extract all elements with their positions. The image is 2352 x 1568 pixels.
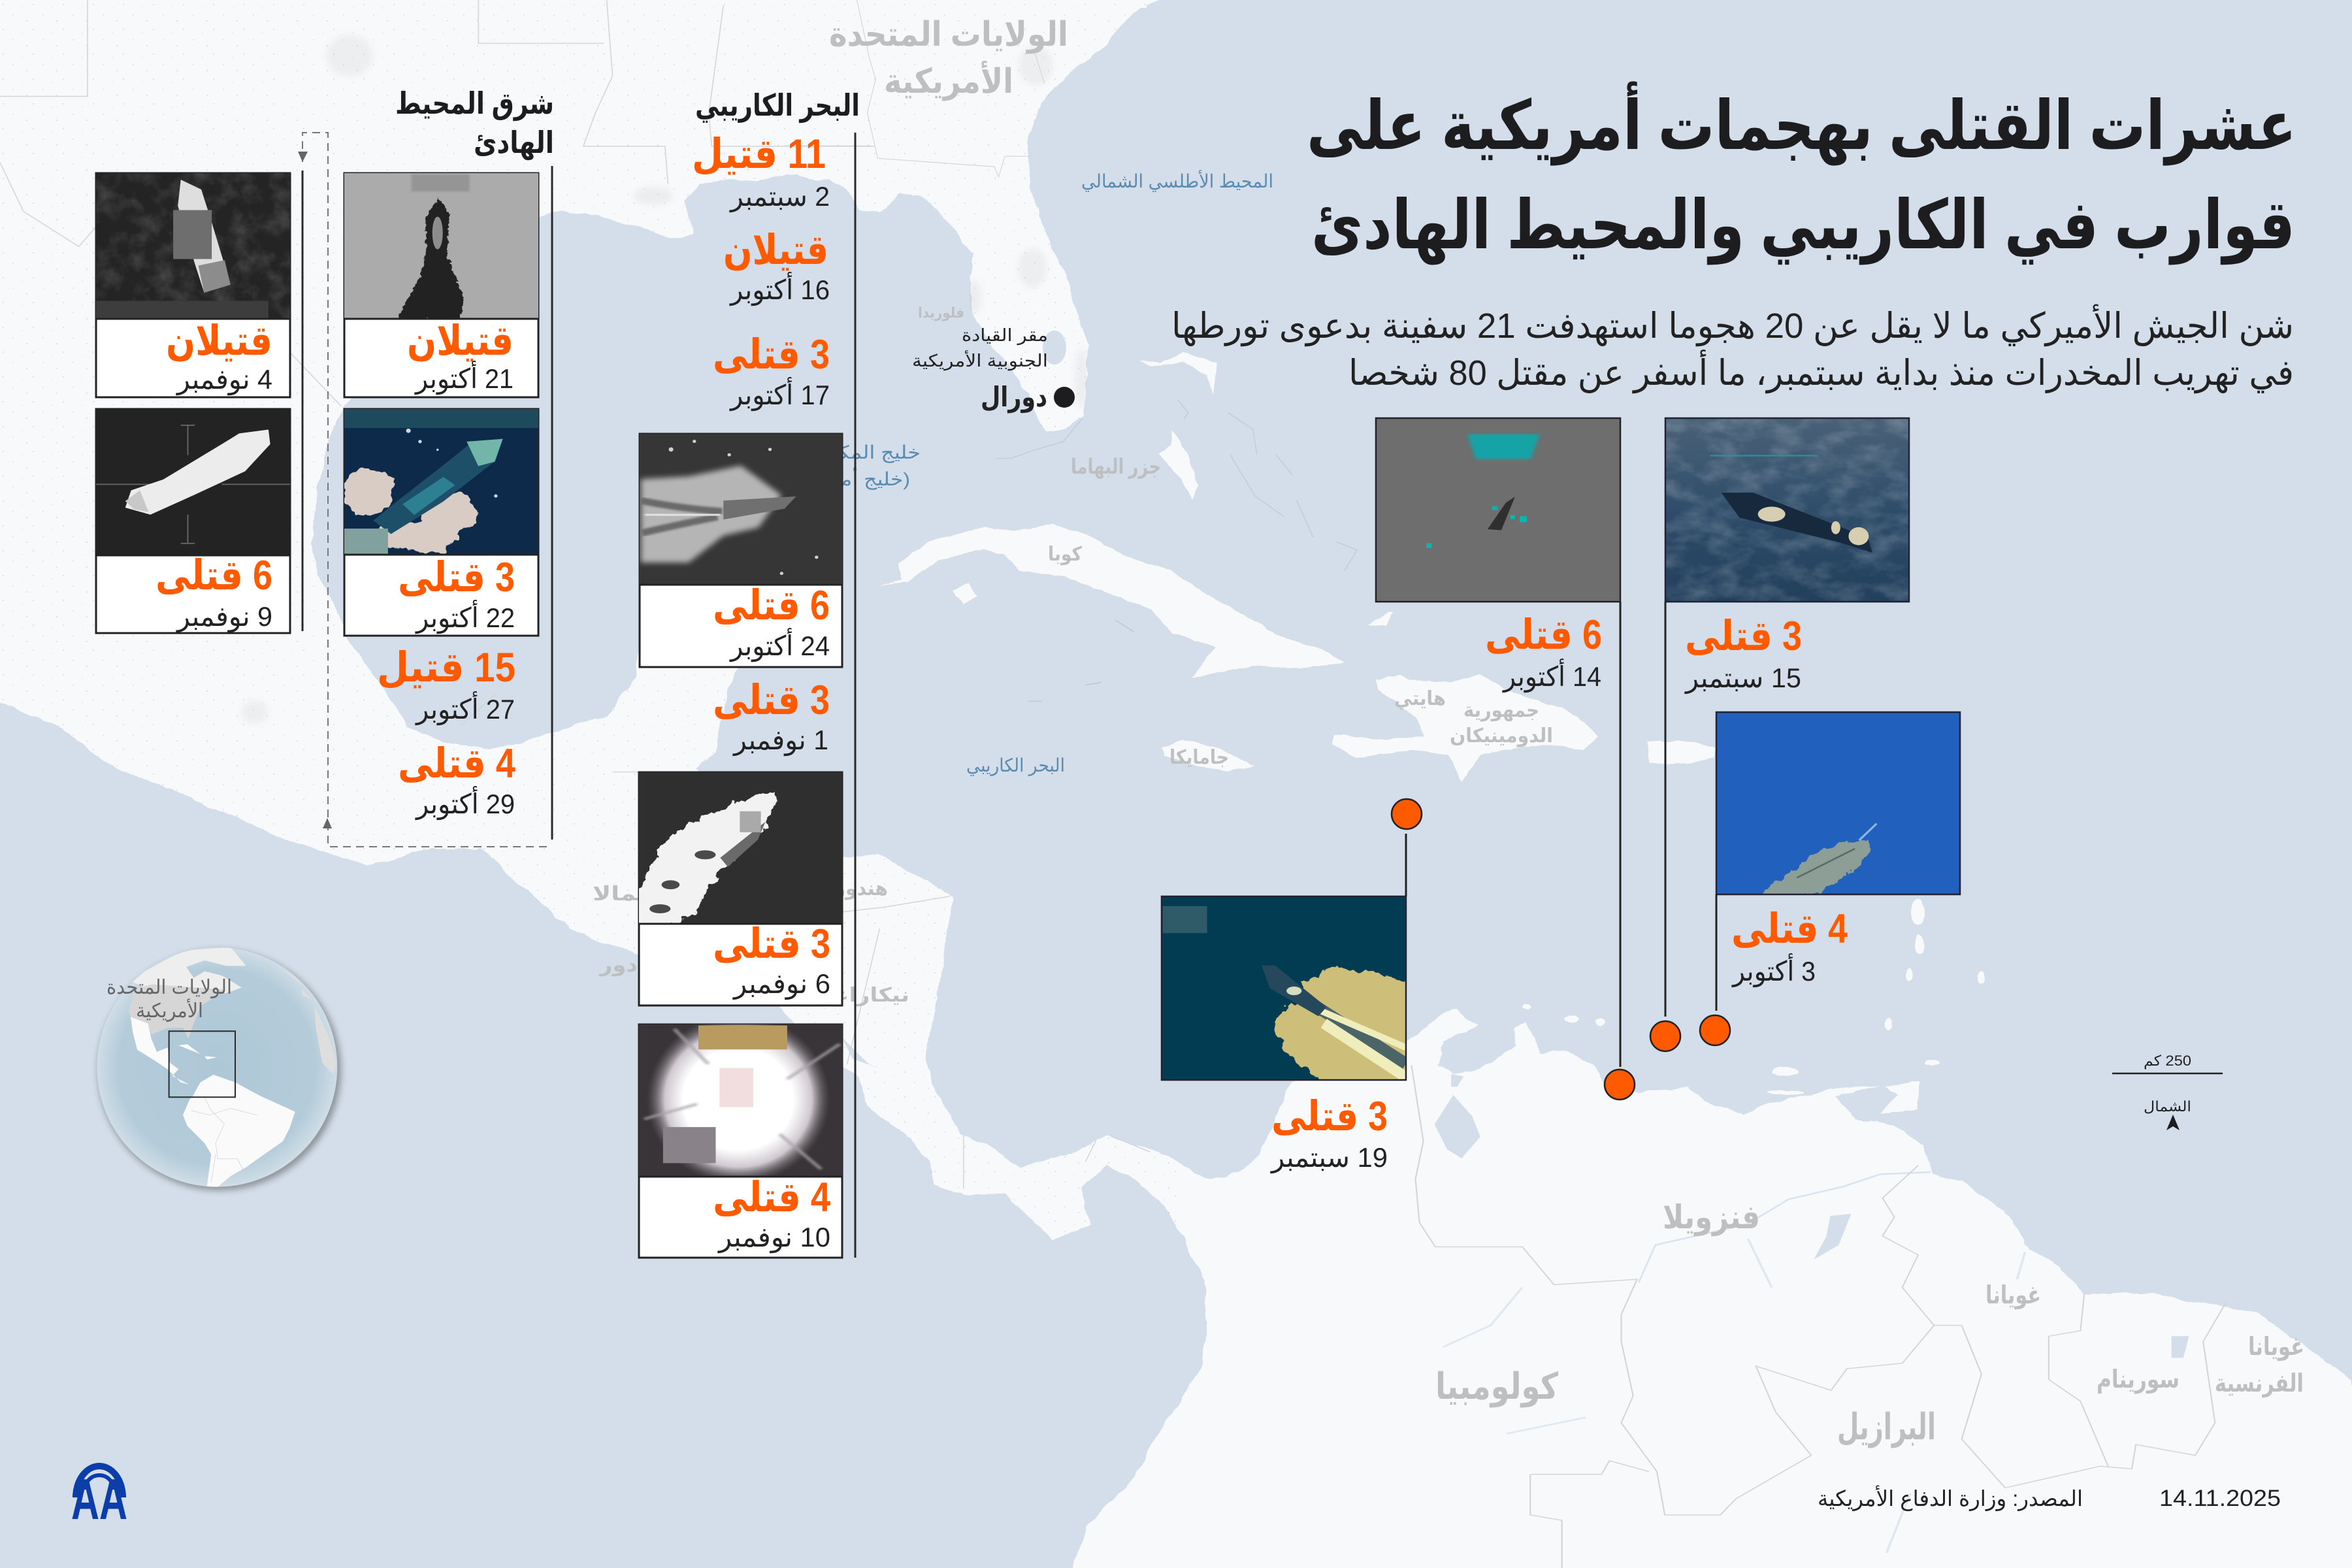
map labels: seas: خليج المكسيك <box>796 442 921 463</box>
map labels: countries: الدومينيكان <box>1450 725 1553 747</box>
map labels: countries: هندوراس <box>803 878 888 900</box>
dashed bracket linking Pacific columns <box>302 133 552 847</box>
map labels: countries: كولومبيا <box>1435 1365 1558 1408</box>
map labels: countries: نيكاراغوا <box>811 985 909 1006</box>
entry: 1 November: 3 قتلى <box>713 678 830 723</box>
card: 9 November <box>96 409 290 633</box>
heading: Eastern Pacific column: شرق المحيط <box>395 86 554 121</box>
entry: 16 October: قتيلان <box>723 227 828 273</box>
callout: 19 September <box>1162 834 1411 1173</box>
card: 10 November: 10 نوفمبر <box>717 1222 830 1253</box>
map labels: countries: الأمريكية <box>884 60 1013 101</box>
heading: Eastern Pacific column <box>395 86 554 160</box>
inset globe <box>97 947 341 1190</box>
card: 9 November: 9 نوفمبر <box>176 601 272 632</box>
logo: Anadolu Agency: AA <box>71 1467 127 1531</box>
entry: 29 October: 29 أكتوبر <box>415 786 515 820</box>
subtitle <box>1171 304 2294 393</box>
entry: 1 November: 1 نوفمبر <box>732 725 828 756</box>
entry: 17 October: 3 قتلى <box>713 332 830 378</box>
callout: 14 October <box>1376 418 1620 1067</box>
entry: 29 October <box>398 741 515 820</box>
subtitle: شن الجيش الأميركي ما لا يقل عن 20 هجوما استهدفت 21 سفينة بدعوى تورطها <box>1171 304 2294 346</box>
map labels: countries: فنزويلا <box>1663 1199 1760 1237</box>
marker: Doral headquarters: مقر القيادة <box>962 325 1048 346</box>
callout: 3 October <box>1716 712 1960 1011</box>
card: 22 October <box>344 409 538 636</box>
callout: 15 September: 15 سبتمبر <box>1684 662 1801 694</box>
card: 22 October: 3 قتلى <box>398 555 515 600</box>
map labels: seas <box>796 169 1273 776</box>
callout: 19 September: 3 قتلى <box>1271 1094 1388 1139</box>
card: 9 November: 6 قتلى <box>155 553 272 598</box>
entry: 17 October <box>713 332 830 411</box>
entry: 16 October <box>723 227 830 306</box>
map labels: countries: كوبا <box>1048 544 1082 565</box>
map labels: countries: هايتي <box>1394 688 1446 710</box>
subtitle: في تهريب المخدرات منذ بداية سبتمبر، ما أسفر عن مقتل 80 شخصا <box>1348 350 2294 393</box>
scale bar and north arrow: 250 كم <box>2144 1053 2191 1070</box>
entry: 2 September <box>692 131 830 212</box>
map labels: countries: البرازيل <box>1837 1406 1936 1448</box>
column dividers <box>302 133 855 1258</box>
marker: Doral headquarters: دورال <box>981 382 1047 414</box>
card: 6 November: 3 قتلى <box>713 921 830 967</box>
inset globe: الأمريكية <box>136 998 203 1022</box>
map labels: countries: جزر البهاما <box>1071 455 1161 479</box>
map labels: countries: الفرنسية <box>2215 1370 2304 1397</box>
entry: 27 October: 15 قتيل <box>377 645 515 691</box>
map labels: countries: الولايات المتحدة <box>829 16 1068 54</box>
card: 10 November <box>639 1014 842 1258</box>
card: 24 October <box>640 434 842 667</box>
title <box>1307 81 2296 265</box>
card: 24 October: 24 أكتوبر <box>729 628 830 662</box>
source: المصدر: وزارة الدفاع الأمريكية <box>1818 1485 2083 1511</box>
callout: 15 September <box>1665 418 1909 1017</box>
inset globe: الولايات المتحدة <box>106 977 232 998</box>
entry: 2 September: 2 سبتمبر <box>729 181 830 212</box>
strike location markers <box>1392 799 1730 1100</box>
callout: 3 October: 4 قتلى <box>1731 906 1848 952</box>
entry: 2 September: 11 قتيل <box>692 131 826 177</box>
card: 10 November: 4 قتلى <box>713 1175 830 1220</box>
entry: 27 October: 27 أكتوبر <box>415 691 515 725</box>
card: 6 November: 6 نوفمبر <box>732 968 830 1000</box>
map labels: countries: غويانا <box>2248 1333 2304 1361</box>
lakes and rivers <box>841 331 2189 1553</box>
card: 21 October: قتيلان <box>407 318 514 364</box>
map labels: countries: غواتيمالا <box>593 883 697 905</box>
map labels: countries: جمهورية <box>1463 700 1539 721</box>
logo: Anadolu Agency <box>71 1466 127 1531</box>
date: 14.11.2025 <box>2159 1486 2281 1511</box>
marker: Doral headquarters <box>912 325 1075 414</box>
map labels: countries: السلفادور <box>598 955 709 977</box>
card: 24 October: 6 قتلى <box>713 583 830 629</box>
card: 21 October: 21 أكتوبر <box>414 361 514 395</box>
map labels: countries: جامايكا <box>1169 747 1229 768</box>
scale bar and north arrow: الشمال <box>2144 1098 2191 1115</box>
entry: 29 October: 4 قتلى <box>398 741 515 787</box>
card: 6 November <box>636 772 842 1005</box>
map labels: seas: المحيط الأطلسي الشمالي <box>1081 169 1273 192</box>
scale bar and north arrow <box>2112 1053 2223 1130</box>
map labels: countries: غويانا <box>1985 1282 2041 1309</box>
callout: 19 September: 19 سبتمبر <box>1270 1142 1388 1173</box>
card: 4 November <box>96 173 290 397</box>
entry: 16 October: 16 أكتوبر <box>729 272 830 306</box>
callout: 3 October: 3 أكتوبر <box>1731 953 1816 987</box>
map labels: countries: فلوريدا <box>918 304 964 321</box>
card: 22 October: 22 أكتوبر <box>415 600 515 634</box>
card: 21 October <box>344 173 538 397</box>
callout: 14 October: 14 أكتوبر <box>1502 659 1601 693</box>
entry: 27 October <box>377 645 515 725</box>
callout: 14 October: 6 قتلى <box>1485 612 1602 658</box>
entry: 1 November <box>713 678 830 756</box>
callout: 15 September: 3 قتلى <box>1685 613 1802 659</box>
map labels: seas: (خليج أمريكا) <box>799 466 910 490</box>
map labels: countries <box>593 16 2304 1448</box>
marker: Doral headquarters: الجنوبية الأمريكية <box>912 350 1048 371</box>
map labels: seas: البحر الكاريبي <box>966 755 1065 776</box>
heading: Eastern Pacific column: الهادئ <box>474 125 554 160</box>
bracket arrows <box>298 152 332 828</box>
heading: Caribbean column: البحر الكاريبي <box>695 88 860 123</box>
map labels: countries: سورينام <box>2097 1366 2180 1394</box>
entry: 17 October: 17 أكتوبر <box>729 377 830 411</box>
card: 4 November: قتيلان <box>166 318 272 364</box>
card: 4 November: 4 نوفمبر <box>176 364 272 395</box>
